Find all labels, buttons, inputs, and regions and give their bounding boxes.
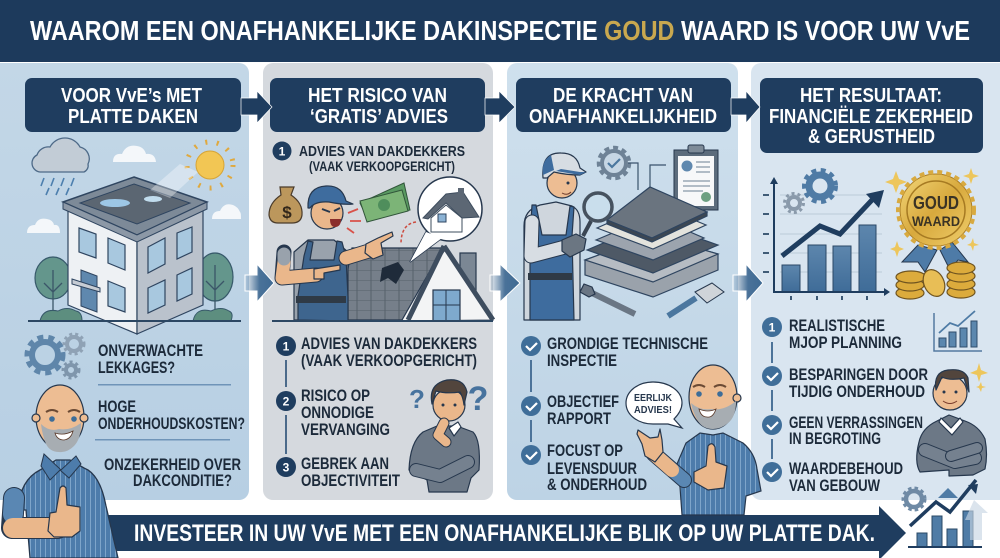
numbered list: risks: GEBREK AAN: [301, 455, 389, 473]
illustration: inspector with magnifier: [524, 153, 612, 320]
checklist: inspection: RAPPORT: [547, 410, 611, 428]
numbered list: risks: OBJECTIVITEIT: [301, 472, 400, 490]
icon: trees: [35, 253, 233, 321]
icon: clipboard report: [674, 145, 718, 210]
checklist: results: VAN GEBOUW: [789, 477, 880, 495]
illustration: doubtful man with question marks: ?: [409, 384, 425, 414]
icon: clouds: [27, 146, 241, 233]
icon: speech circle with house: [410, 177, 482, 262]
heading: panel 3: [516, 78, 731, 132]
icon: gold medal: WAARD: [912, 213, 960, 229]
arrow: heading 3 to 4: [731, 91, 760, 123]
checklist: results: BESPARINGEN DOOR: [789, 366, 928, 384]
subheading: advies van dakdekkers: [272, 142, 465, 174]
checklist: inspection: & ONDERHOUD: [547, 476, 647, 494]
illustration: house with damaged roof: [338, 246, 493, 321]
icon: gold medal: [898, 172, 974, 272]
checklist: inspection: [521, 335, 708, 494]
icon: mini chart: [934, 311, 982, 351]
checklist: inspection: INSPECTIE: [547, 352, 617, 370]
icon: tools: [580, 283, 724, 316]
icon: gears: [27, 334, 84, 378]
arrow: middle 2: [490, 264, 520, 302]
checklist: results: [762, 317, 928, 495]
illustration: roof layers: [585, 187, 718, 297]
icon: money bag: $: [282, 203, 292, 222]
text block: questions: [95, 342, 245, 490]
illustration: advisor with speech bubble: [637, 365, 761, 515]
illustration: smiling advisor bottom-left: [12, 385, 118, 558]
text block: questions: HOGE: [98, 398, 136, 416]
arrow: heading 1 to 2: [241, 91, 272, 123]
arrow: middle 1: [245, 264, 274, 302]
title banner: WAAROM EEN ONAFHANKELIJKE DAKINSPECTIE GOUD WAARD IS VOOR UW VvE: [30, 15, 970, 46]
checklist: inspection: LEVENSDUUR: [547, 460, 637, 478]
panel: het risico van gratis advies: [263, 63, 493, 500]
numbered list: risks: 3: [283, 460, 290, 474]
heading: panel 2: ‘GRATIS’ ADVIES: [310, 106, 448, 128]
heading: panel 3: ONAFHANKELIJKHEID: [529, 106, 717, 128]
icon: rain cloud: [32, 138, 89, 195]
arrow: middle 3: [733, 264, 763, 302]
illustration: angry roofer: [282, 186, 393, 321]
numbered list: risks: [276, 335, 477, 490]
icon: growth chart bottom right: [903, 480, 988, 547]
checklist: results: GEEN VERRASSINGEN: [789, 414, 923, 432]
icon: gold medal: GOUD: [913, 193, 959, 213]
icon: gold coins: [896, 262, 975, 300]
illustration: doubtful man with question marks: ?: [468, 380, 488, 418]
text block: questions: DAKCONDITIE?: [133, 472, 232, 490]
checklist: results: MJOP PLANNING: [789, 334, 902, 352]
callout: eerlijk advies: ADVIES!: [634, 404, 672, 416]
icon: sparkles: [885, 168, 979, 257]
callout: eerlijk advies: EERLIJK: [634, 392, 672, 404]
panel: voor VvE's met platte daken: [0, 63, 249, 500]
heading: panel 4: [760, 78, 983, 153]
heading: panel 4: & GERUSTHEID: [808, 126, 935, 148]
banner: call to action: [105, 506, 906, 558]
heading: panel 2: [270, 78, 485, 132]
panel: de kracht van onafhankelijkheid: [507, 63, 738, 500]
arrow: heading 2 to 3: [485, 91, 515, 123]
checklist: results: REALISTISCHE: [789, 317, 885, 335]
numbered list: risks: 1: [283, 340, 290, 354]
heading: panel 2: HET RISICO VAN: [308, 85, 447, 107]
icon: gear with check: [598, 148, 666, 190]
checklist: inspection: OBJECTIEF: [547, 393, 619, 411]
chart: rising bars with arrow: [763, 177, 890, 300]
illustration: doubtful man with question marks: [409, 380, 488, 492]
heading: panel 4: HET RESULTAAT:: [800, 85, 942, 107]
text block: questions: ONVERWACHTE: [98, 342, 203, 360]
subheading: advies van dakdekkers: (VAAK VERKOOPGERICHT): [309, 159, 455, 174]
heading: panel 1: VOOR VvE’s MET: [61, 85, 202, 107]
ground line: [28, 320, 241, 322]
numbered list: risks: VERVANGING: [301, 421, 390, 439]
icon: sun: [187, 142, 233, 188]
illustration: satisfied man: [917, 363, 988, 476]
title banner: [0, 0, 1000, 62]
icon: red dashed arrow: [401, 222, 416, 244]
heading: panel 1: PLATTE DAKEN: [68, 106, 198, 128]
numbered list: risks: 2: [283, 394, 290, 408]
numbered list: risks: ONNODIGE: [301, 404, 374, 422]
icon: money bag: [269, 187, 302, 223]
text block: questions: LEKKAGES?: [98, 359, 175, 377]
ground line: [272, 320, 493, 322]
text block: questions: ONZEKERHEID OVER: [104, 456, 241, 474]
checklist: results: WAARDEBEHOUD: [789, 460, 903, 478]
illustration: building with flat roof: [63, 164, 207, 334]
checklist: results: 1: [769, 320, 776, 334]
heading: panel 3: DE KRACHT VAN: [553, 85, 693, 107]
panel: het resultaat: [751, 63, 1000, 500]
callout: eerlijk advies: [626, 382, 682, 428]
subheading: advies van dakdekkers: 1: [279, 144, 286, 158]
checklist: inspection: GRONDIGE TECHNISCHE: [547, 335, 708, 353]
checklist: results: IN BEGROTING: [789, 430, 881, 448]
numbered list: risks: RISICO OP: [301, 387, 370, 405]
icon: banknotes: [360, 183, 410, 222]
heading: panel 1: [25, 78, 241, 132]
text block: questions: ONDERHOUDSKOSTEN?: [98, 415, 245, 433]
numbered list: risks: ADVIES VAN DAKDEKKERS: [301, 335, 477, 353]
icon: gears: [784, 170, 836, 212]
numbered list: risks: (VAAK VERKOOPGERICHT): [301, 352, 477, 370]
subheading: advies van dakdekkers: ADVIES VAN DAKDEKKERS: [299, 144, 465, 160]
checklist: inspection: FOCUST OP: [547, 442, 623, 460]
checklist: results: TIJDIG ONDERHOUD: [789, 383, 925, 401]
